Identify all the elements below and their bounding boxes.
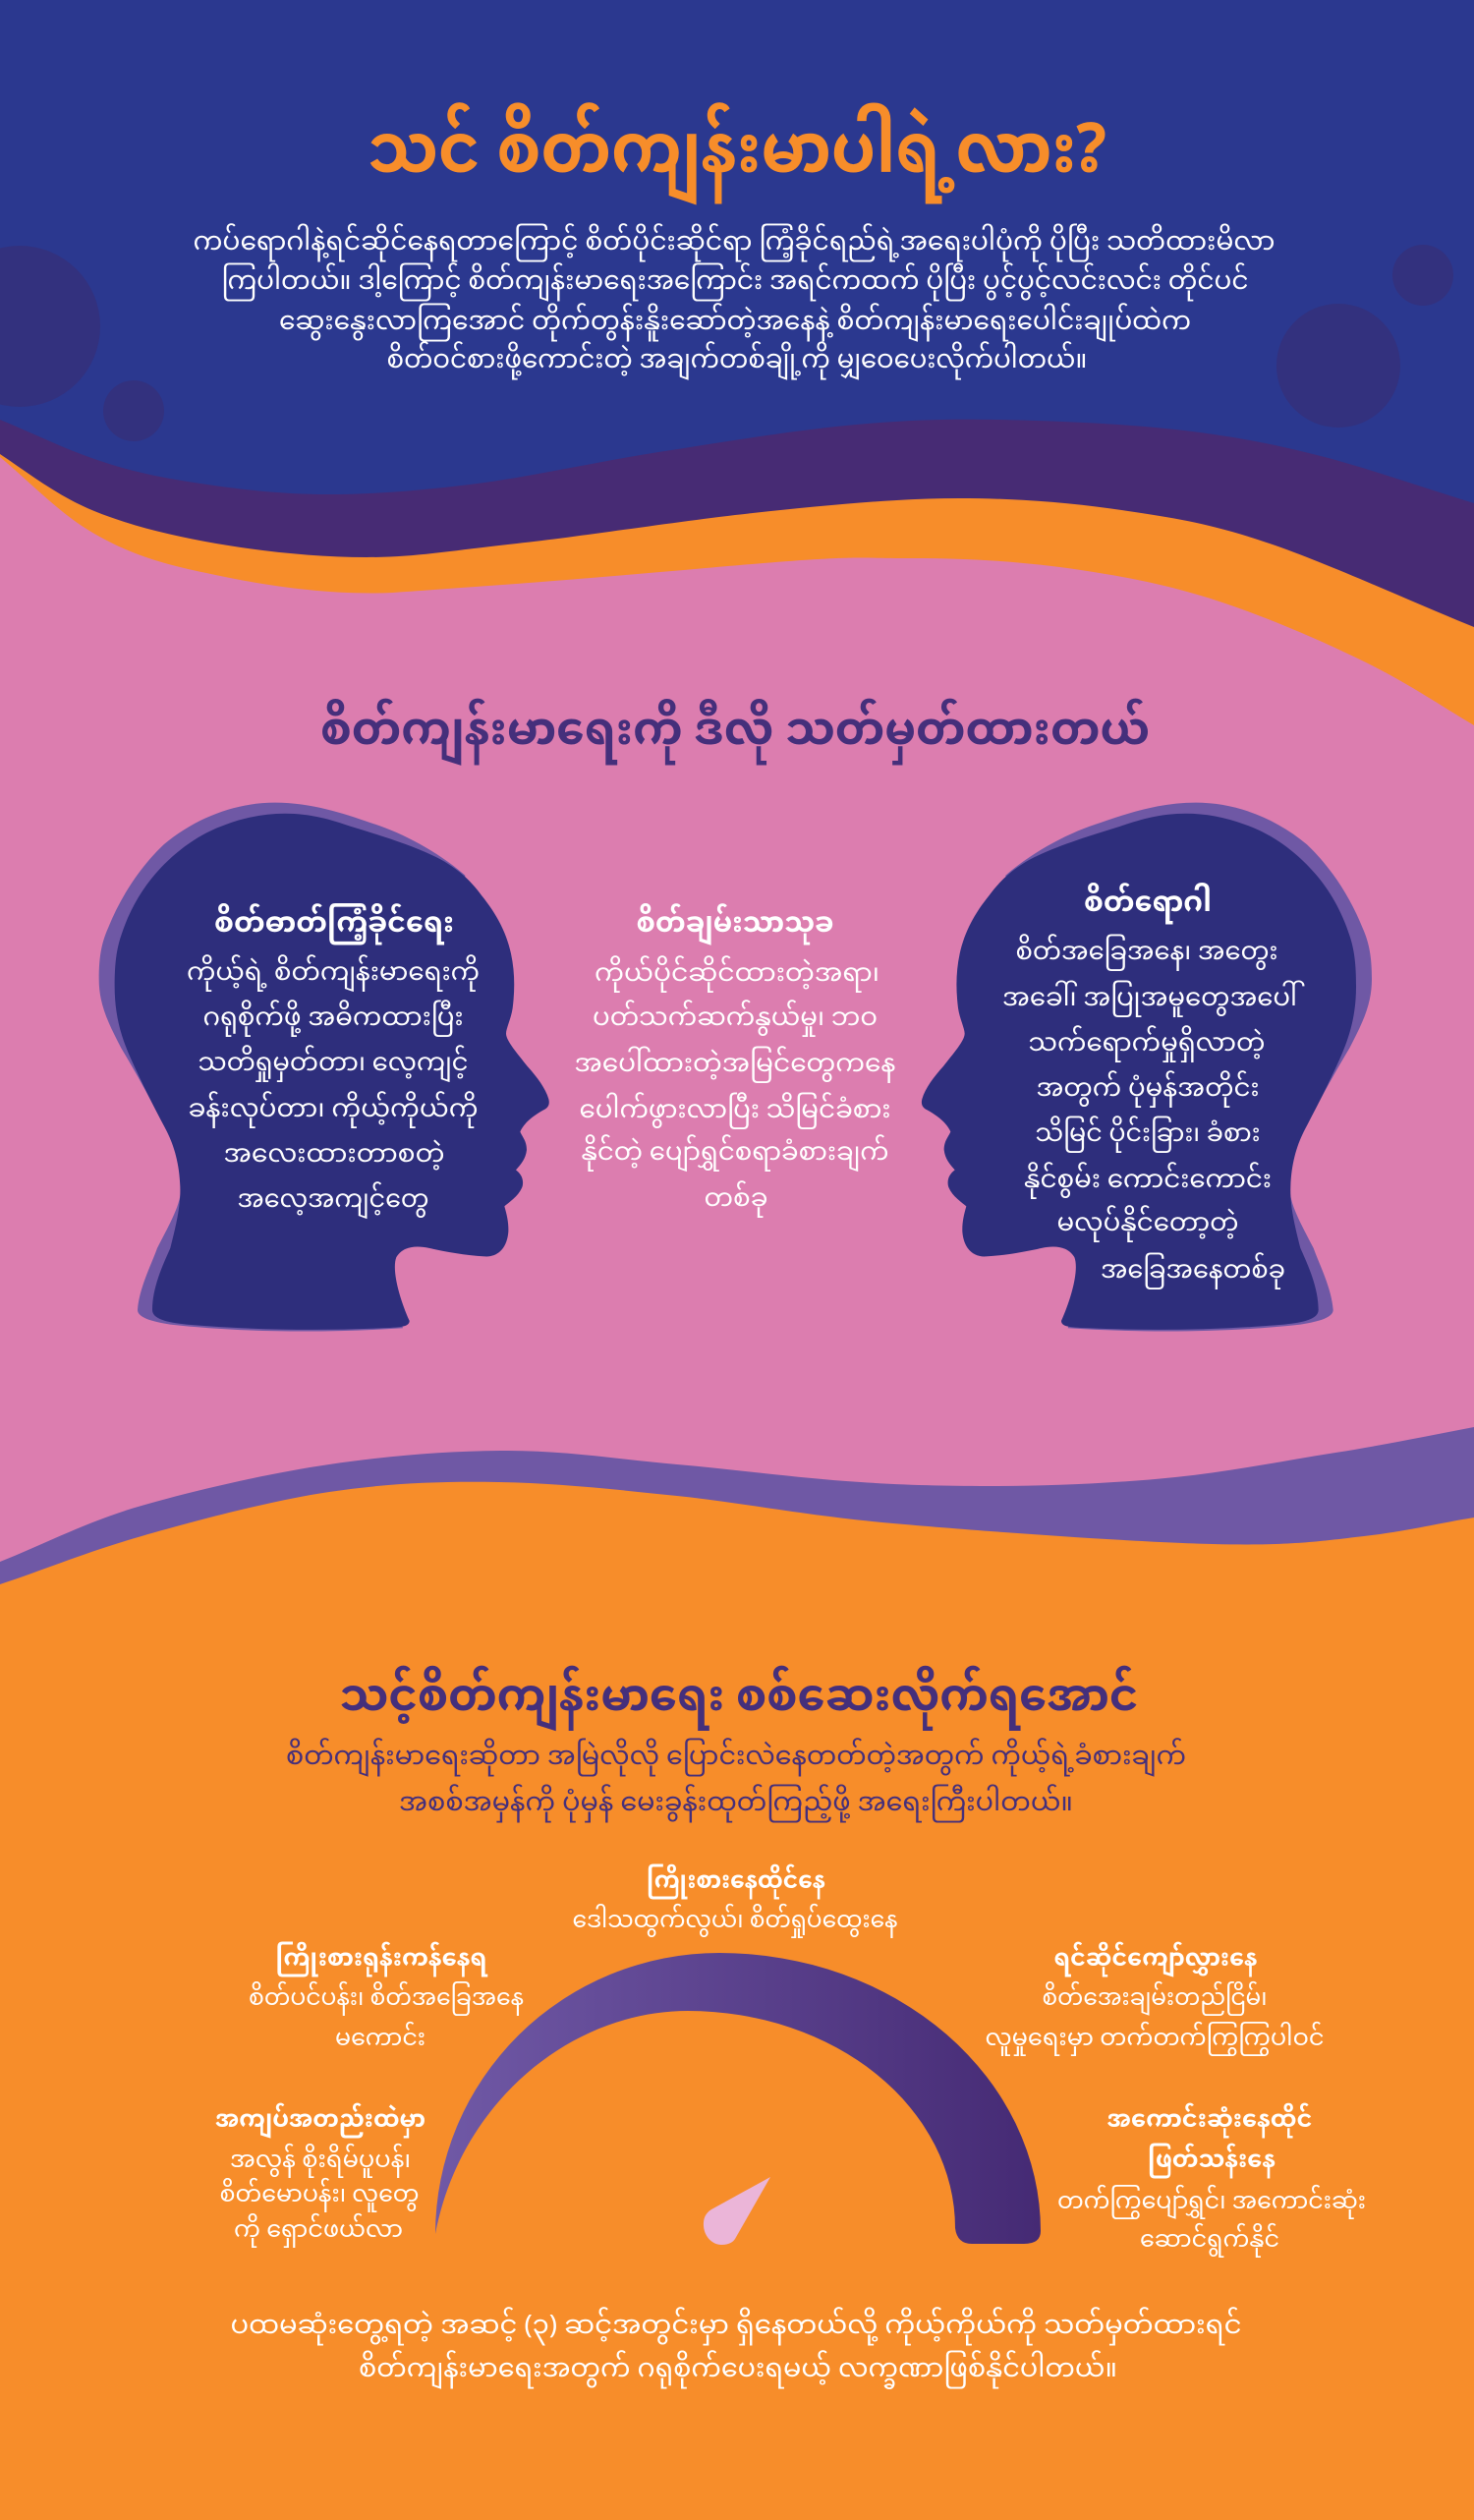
gauge label: lower left: ကို ရှောင်ဖယ်လာ [234, 2205, 403, 2258]
right head text: အတွက် ပုံမှန်အတိုင်း [1036, 1062, 1260, 1117]
footer note [230, 2299, 1242, 2399]
intro paragraph: ဆွေးနွေးလာကြအောင် တိုက်တွန်းနိူးဆော်တဲ့အနေနဲ့ စိတ်ကျန်းမာရေးပေါင်းချုပ်ထဲက [279, 295, 1191, 352]
right head text: နိုင်စွမ်း ကောင်းကောင်း [1024, 1154, 1272, 1209]
center text panel: တစ်ခု [704, 1173, 768, 1228]
gauge label: lower right: အကောင်းဆုံးနေထိုင် [1106, 2095, 1313, 2148]
gauge label: lower left [215, 2095, 425, 2258]
intro paragraph: ကပ်ရောဂါနဲ့ရင်ဆိုင်နေရတာကြောင့် စိတ်ပိုင်းဆိုင်ရာ ကြံ့ခိုင်ရည်ရဲ့အရေးပါပုံကို ပိုပြီး သတိထားမိလာ [193, 215, 1276, 272]
gauge label: upper left: စိတ်ပင်ပန်း၊ စိတ်အခြေအနေ [249, 1974, 524, 2026]
left head text: အလေ့အကျင့်တွေ [238, 1174, 428, 1229]
footer note: ပထမဆုံးတွေ့ရတဲ့ အဆင့် (၃) ဆင့်အတွင်းမှာ ရှိနေတယ်လို့ ကိုယ့်ကိုယ်ကို သတ်မှတ်ထားရင် [230, 2299, 1242, 2356]
gauge label: lower right: တက်ကြွပျော်ရွှင်၊ အကောင်းဆုံး [1057, 2177, 1366, 2229]
right head silhouette [922, 803, 1372, 1332]
left head text: ဂရုစိုက်ဖို့ အဓိကထားပြီး [202, 992, 464, 1047]
gauge label: upper right: လူမှုရေးမှာ တက်တက်ကြွကြွပါဝင် [985, 2014, 1325, 2066]
orange wave [0, 454, 1474, 885]
center text panel: ပတ်သက်ဆက်နွယ်မှု၊ ဘဝ [593, 992, 878, 1047]
right head text: သက်ရောက်မှုရှိလာတဲ့ [1028, 1017, 1266, 1072]
left head text: ကိုယ့်ရဲ့ စိတ်ကျန်းမာရေးကို [187, 946, 480, 1002]
intro paragraph: စိတ်ဝင်စားဖို့ကောင်းတဲ့ အချက်တစ်ချို့ကို မျှဝေပေးလိုက်ပါတယ်။ [387, 333, 1087, 390]
right head text: စိတ်အခြေအနေ၊ အတွေး [1016, 926, 1277, 981]
title: သင် စိတ်ကျန်းမာပါရဲ့လား? [368, 82, 1106, 232]
left head text: သတိရှုမှတ်တာ၊ လေ့ကျင့် [198, 1037, 468, 1092]
center text panel [574, 894, 896, 1228]
footer note: စိတ်ကျန်းမာရေးအတွက် ဂရုစိုက်ပေးရမယ့် လက္ခဏာဖြစ်နိုင်ပါတယ်။ [359, 2342, 1117, 2399]
gauge label: top: ကြိုးစားနေထိုင်နေ [647, 1857, 825, 1909]
gauge label: upper left: မကောင်း [335, 2014, 425, 2066]
right head text: အခြေအနေတစ်ခု [1101, 1244, 1285, 1299]
intro paragraph [193, 215, 1276, 390]
center text panel: ပေါက်ဖွားလာပြီး သိမြင်ခံစား [580, 1084, 890, 1139]
gauge label: top [572, 1857, 898, 1948]
pink middle background [0, 457, 1474, 1671]
gauge arc [435, 1953, 1041, 2244]
intro paragraph: ကြပါတယ်။ ဒါ့ကြောင့် စိတ်ကျန်းမာရေးအကြောင်း အရင်ကထက် ပိုပြီး ပွင့်ပွင့်လင်းလင်း တိုင်ပင် [222, 255, 1248, 312]
left head text [187, 894, 480, 1229]
orange bottom background [0, 1482, 1474, 2520]
gauge label: top: ဒေါသထွက်လွယ်၊ စိတ်ရှုပ်ထွေးနေ [572, 1896, 898, 1948]
heading: mental health definition: စိတ်ကျန်းမာရေးကို ဒီလို သတ်မှတ်ထားတယ် [320, 686, 1150, 783]
right head text: စိတ်ရောဂါ [1084, 874, 1212, 936]
decorative circles in header [0, 245, 1453, 441]
center text panel: ကိုယ်ပိုင်ဆိုင်ထားတဲ့အရာ၊ [595, 947, 879, 1002]
right head text [1002, 874, 1305, 1299]
gauge label: lower right [1057, 2095, 1366, 2267]
gauge needle [704, 2177, 770, 2245]
center text panel: အပေါ်ထားတဲ့အမြင်တွေကနေ [574, 1038, 896, 1093]
right head text: အခေါ်၊ အပြုအမူတွေအပေါ် [1002, 972, 1305, 1027]
left head panel [99, 803, 549, 1332]
left head text: ခန်းလုပ်တာ၊ ကိုယ့်ကိုယ်ကို [189, 1083, 478, 1138]
gauge label: upper right: စိတ်အေးချမ်းတည်ငြိမ်၊ [1042, 1974, 1268, 2026]
gauge label: lower right: ဖြတ်သန်းနေ [1148, 2136, 1276, 2188]
navy header background [0, 0, 1474, 786]
left head text: အလေးထားတာစတဲ့ [224, 1128, 444, 1183]
gauge label: upper right: ရင်ဆိုင်ကျော်လွှားနေ [1053, 1934, 1258, 1986]
gauge label: upper left [249, 1934, 524, 2066]
right head panel [922, 803, 1372, 1332]
center text panel: စိတ်ချမ်းသာသုခ [637, 894, 833, 956]
right head text: သိမြင် ပိုင်းခြား၊ ခံစား [1036, 1108, 1260, 1163]
dark purple wave [0, 420, 1474, 885]
check intro text: စိတ်ကျန်းမာရေးဆိုတာ အမြဲလိုလို ပြောင်းလဲနေတတ်တဲ့အတွက် ကိုယ့်ရဲ့ခံစားချက် [286, 1730, 1186, 1787]
gauge label: lower left: စိတ်မောပန်း၊ လူတွေ [220, 2170, 419, 2222]
heading: check your mental health: သင့်စိတ်ကျန်းမာရေး စစ်ဆေးလိုက်ရအောင် [340, 1651, 1138, 1748]
check intro text [286, 1730, 1186, 1833]
gauge label: upper right [985, 1934, 1325, 2066]
center text panel: နိုင်တဲ့ ပျော်ရွှင်စရာခံစားချက် [582, 1126, 888, 1181]
left head text: စိတ်ဓာတ်ကြံ့ခိုင်ရေး [214, 894, 454, 956]
gauge label: upper left: ကြိုးစားရုန်းကန်နေရ [275, 1934, 488, 1986]
right head text: မလုပ်နိုင်တော့တဲ့ [1057, 1197, 1238, 1252]
gauge label: lower left: အလွန် စိုးရိမ်ပူပန်၊ [230, 2136, 411, 2188]
check intro text: အစစ်အမှန်ကို ပုံမှန် မေးခွန်းထုတ်ကြည့်ဖို့ အရေးကြီးပါတယ်။ [399, 1776, 1073, 1833]
light purple wave [0, 1427, 1474, 1769]
gauge label: lower right: ဆောင်ရွက်နိုင် [1140, 2215, 1279, 2267]
gauge label: lower left: အကျပ်အတည်းထဲမှာ [215, 2095, 425, 2148]
left head silhouette [99, 803, 549, 1332]
